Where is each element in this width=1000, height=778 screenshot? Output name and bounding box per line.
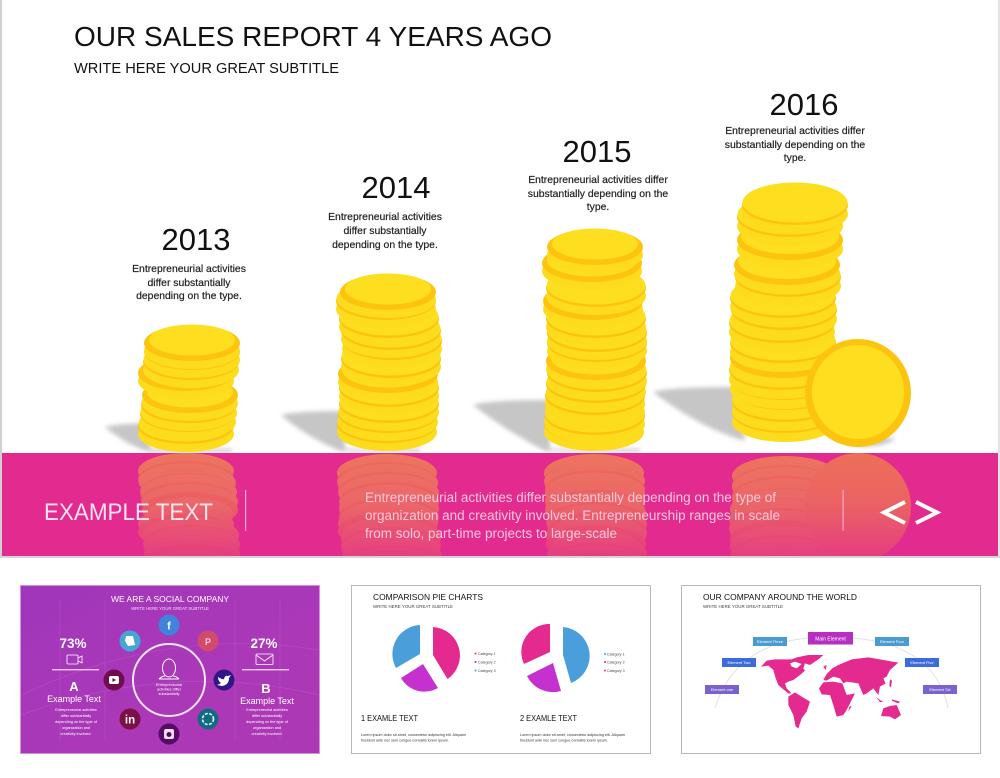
year block 2014: differ substantially (344, 226, 427, 237)
left metric: 73% (59, 636, 87, 651)
element two (722, 658, 756, 667)
main slide background (0, 0, 1000, 558)
caption 1: tincidunt ante nec sem congue convallis lorem ipsum. (361, 738, 449, 742)
pie chart 2 (521, 624, 625, 692)
right metric: depending on the type of (246, 720, 289, 724)
element six (923, 685, 957, 694)
coin reflections (138, 453, 911, 556)
thumbnail: comparison pie charts (352, 586, 650, 754)
caption 2 (520, 714, 625, 742)
year block 2015 (528, 134, 668, 213)
right metric: differ substantially (252, 714, 282, 718)
center circle: substantially (159, 692, 180, 696)
thumbnail: social company: WRITE HERE YOUR GREAT SUBTITLE (131, 606, 209, 611)
year block 2013: differ substantially (148, 278, 231, 289)
left metric: creativity involved. (60, 732, 92, 736)
icon: twitter (214, 670, 234, 690)
year block 2014: Entrepreneurial activities (328, 212, 442, 223)
left metric: depending on the type of (55, 720, 98, 724)
year block 2015: substantially depending on the (528, 189, 668, 200)
social icons (104, 614, 234, 744)
icon: pinterest: P (205, 637, 211, 647)
icon: linkedin: in (125, 714, 135, 726)
icon: youtube (104, 670, 124, 690)
right metric: organization and (253, 726, 281, 730)
center circle (133, 644, 205, 716)
icon: instagram (158, 724, 180, 744)
thumbnail: world map (682, 586, 980, 754)
thumbnail: social company (20, 586, 320, 754)
right metric: Entrepreneurial activities (246, 708, 288, 712)
world map (761, 655, 901, 729)
caption 2: Lorem ipsum dolor sit amet, consectetur adipiscing elit. Aliquam (520, 733, 625, 737)
main element box: Main Element (815, 636, 846, 642)
year block 2014: 2014 (362, 170, 430, 205)
pie chart 1 (392, 625, 496, 692)
legend: Category 3 (607, 669, 625, 673)
center circle: Entrepreneurial (156, 683, 182, 687)
left metric (47, 636, 101, 736)
icon: video camera (67, 655, 82, 664)
caption 2: 2 EXAMLE TEXT (520, 714, 577, 723)
element three (753, 637, 787, 646)
connector arc (715, 638, 948, 708)
element one (705, 685, 739, 694)
band paragraph: from solo, part-time projects to large-scale (365, 526, 617, 542)
slide heading: WE ARE A SOCIAL COMPANY (111, 594, 229, 604)
coin stack 2015 (542, 228, 647, 451)
year block 2014 (328, 170, 442, 251)
icon: person (159, 659, 179, 679)
year block 2016: Entrepreneurial activities differ (725, 126, 865, 137)
year block 2015: Entrepreneurial activities differ (528, 175, 668, 186)
year block 2016: type. (784, 153, 806, 164)
legend: Category 3 (478, 669, 496, 673)
year block 2016: 2016 (770, 87, 838, 122)
thumbnail: comparison pie charts: WRITE HERE YOUR GREAT SUBTITLE (373, 604, 453, 609)
caption 1 (361, 714, 466, 742)
element five (905, 658, 939, 667)
icon: evernote (120, 630, 140, 652)
subtitle: WRITE HERE YOUR GREAT SUBTITLE (74, 60, 339, 77)
element four: Element Four (880, 639, 905, 644)
element four (875, 637, 909, 646)
title: OUR SALES REPORT 4 YEARS AGO (74, 21, 552, 52)
year block 2016: substantially depending on the (725, 140, 865, 151)
right metric: B (261, 681, 271, 696)
thumbnail: world map: WRITE HERE YOUR GREAT SUBTITLE (703, 604, 783, 609)
year block 2015: type. (587, 202, 609, 213)
coin stack 2013 (138, 324, 240, 452)
icon: navigation arrows (884, 502, 937, 523)
legend: Category 2 (607, 660, 625, 664)
caption 1: Lorem ipsum dolor sit amet, consectetur adipiscing elit. Aliquam (361, 733, 466, 737)
main element box (808, 632, 853, 644)
icon: globe (198, 708, 218, 730)
band heading: EXAMPLE TEXT (44, 499, 213, 526)
band divider left (245, 490, 246, 531)
year block 2014: depending on the type. (332, 240, 438, 251)
left metric: Entrepreneurial activities (55, 708, 97, 712)
slide heading: COMPARISON PIE CHARTS (373, 592, 483, 602)
right metric: Example Text (240, 696, 294, 706)
legend (474, 652, 496, 673)
center circle: activities differ (157, 688, 182, 692)
caption 1: 1 EXAMLE TEXT (361, 714, 418, 723)
icon: facebook: f (167, 620, 171, 632)
year block 2015: 2015 (563, 134, 631, 169)
coin stack 2014 (336, 274, 442, 451)
element five: Element Five (910, 660, 934, 665)
legend (604, 652, 625, 673)
legend: Category 1 (607, 652, 625, 656)
band paragraph: Entrepreneurial activities differ substantially depending on the type of (365, 490, 776, 506)
legend: Category 1 (478, 652, 496, 656)
band paragraph (365, 490, 780, 542)
year block 2016 (725, 87, 865, 164)
slide heading: OUR COMPANY AROUND THE WORLD (703, 592, 857, 602)
band divider right (842, 490, 844, 531)
icon: envelope (256, 654, 273, 664)
coin shadows (105, 387, 895, 452)
left metric: differ substantially (61, 714, 91, 718)
coin stacks (138, 182, 911, 452)
pink band (2, 453, 998, 556)
right metric: creativity involved. (251, 732, 283, 736)
loose coin (805, 339, 911, 447)
year block 2013 (132, 222, 246, 302)
legend: Category 2 (478, 660, 496, 664)
caption 2: tincidunt ante nec sem congue convallis lorem ipsum. (520, 738, 608, 742)
element three: Element Three (757, 639, 784, 644)
left metric: organization and (62, 726, 90, 730)
year block 2013: depending on the type. (136, 291, 242, 302)
left metric: Example Text (47, 694, 101, 704)
coin stack 2016 (729, 182, 848, 442)
year block 2013: Entrepreneurial activities (132, 264, 246, 275)
right metric: 27% (250, 636, 278, 651)
element two: Element Two (727, 660, 751, 665)
band paragraph: organization and creativity involved. Entrepreneurship ranges in scale (365, 508, 780, 524)
right metric (240, 636, 294, 736)
element six: Element Six (929, 687, 951, 692)
left metric: A (69, 679, 79, 694)
element one: Element one (711, 687, 734, 692)
year block 2013: 2013 (162, 222, 230, 257)
